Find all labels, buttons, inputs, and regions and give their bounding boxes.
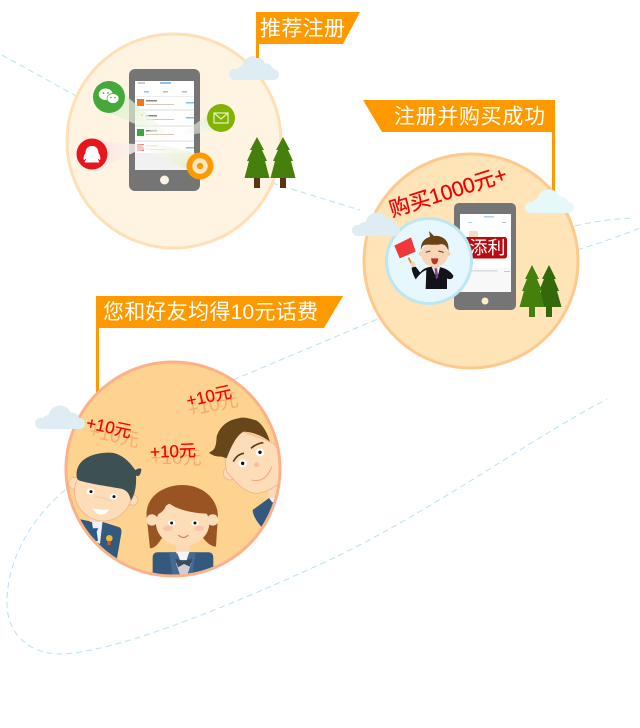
share beams	[104, 93, 220, 170]
panel: step 3 reward	[35, 296, 343, 579]
reward text 1: +10元	[87, 421, 141, 452]
man badge	[386, 218, 472, 304]
icon: camera lens	[186, 152, 214, 180]
trees 1	[244, 137, 296, 188]
reward text 3: +10元	[185, 382, 234, 411]
cloud 3	[352, 212, 400, 236]
purchase text: 购买1000元+	[387, 163, 510, 222]
panel: step 1 recommend	[67, 12, 360, 248]
flag 1	[256, 12, 360, 58]
circle 3 ring	[66, 362, 280, 576]
cloud 1	[229, 56, 279, 80]
people	[69, 418, 285, 579]
icon: mail	[207, 104, 235, 132]
flag 2 pole	[552, 110, 555, 192]
flag 2 label: 注册并购买成功	[394, 106, 545, 128]
flag 2	[363, 100, 555, 132]
reward text 2: +10元	[150, 448, 202, 469]
phone 2	[454, 203, 516, 310]
circle background 2	[364, 154, 578, 368]
circle background 3	[65, 361, 281, 577]
panel: step 2 purchase	[352, 100, 578, 368]
reward text 2: +10元	[150, 441, 196, 462]
icon: wechat	[93, 81, 125, 113]
trees 2	[520, 265, 562, 317]
flag 3	[96, 296, 343, 328]
label: tianli: 添利	[470, 238, 506, 258]
flag 3 label: 您和好友均得10元话费	[103, 301, 318, 324]
boy right	[209, 418, 285, 527]
cloud 2	[525, 190, 574, 213]
man figure	[394, 231, 453, 289]
boy left	[69, 453, 141, 560]
reward text 1: +10元	[84, 413, 133, 442]
circle background 1	[67, 34, 281, 248]
icon: qq	[76, 138, 108, 170]
flag 1 label: 推荐注册	[260, 18, 345, 40]
girl	[146, 485, 218, 579]
phone 1	[129, 69, 200, 191]
cloud 4	[35, 406, 85, 429]
flag 3 pole	[96, 310, 99, 396]
reward text 3: +10元	[186, 390, 240, 421]
